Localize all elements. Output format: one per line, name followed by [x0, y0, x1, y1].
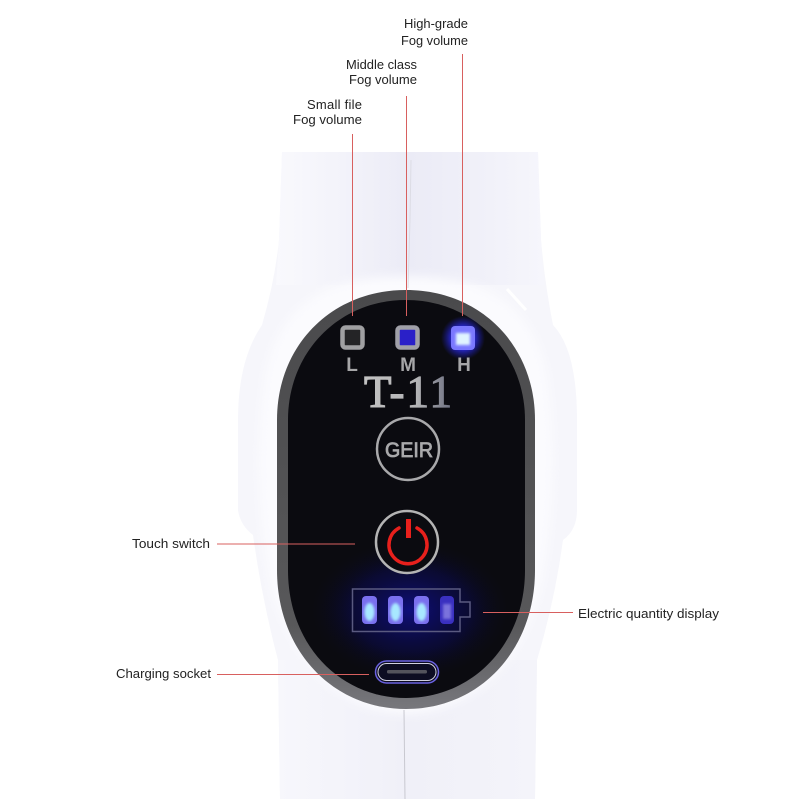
callout: small file fog volume: Fog volume [293, 112, 362, 127]
indicator M: M [400, 355, 416, 376]
callout: high-grade fog volume: Fog volume [401, 33, 468, 48]
callout: high-grade fog volume: High-grade [404, 16, 468, 31]
lower handle [278, 660, 537, 799]
indicator H [441, 316, 485, 376]
power button [376, 511, 438, 573]
callout: touch switch: Touch switch [132, 536, 210, 551]
seam top [408, 160, 411, 288]
callout: charging socket: Charging socket [116, 666, 211, 681]
battery cell 2 [388, 596, 403, 624]
callout: small file fog volume: Small file [307, 97, 362, 112]
indicator L: L [346, 355, 358, 376]
callout: middle class fog volume: Middle class [346, 57, 417, 72]
indicator L [342, 328, 362, 376]
body bulge [259, 276, 553, 714]
panel rim [277, 290, 535, 709]
battery cell 1 [362, 596, 377, 624]
battery glow [310, 540, 510, 680]
upper neck [276, 152, 544, 285]
callout: middle class fog volume [346, 57, 417, 316]
callout: small file fog volume [293, 97, 362, 316]
seam bottom [404, 710, 405, 799]
battery indicator [352, 589, 470, 632]
GEIR badge: GEIR [385, 439, 433, 462]
control panel [277, 290, 535, 709]
callout: high-grade fog volume [401, 16, 468, 316]
GEIR badge [377, 418, 439, 480]
charging socket [376, 661, 438, 683]
highlight notch [507, 289, 526, 310]
model name T-11: T-11 [364, 367, 452, 417]
battery cell 4 [440, 596, 454, 624]
callout: electric quantity display: Electric quantity display [578, 606, 720, 621]
body silhouette [238, 152, 577, 799]
callout: middle class fog volume: Fog volume [349, 72, 417, 87]
battery cell 3 [414, 596, 429, 624]
device body [238, 152, 577, 799]
panel face [288, 300, 525, 698]
indicator H: H [457, 355, 471, 376]
indicator M [398, 328, 418, 376]
